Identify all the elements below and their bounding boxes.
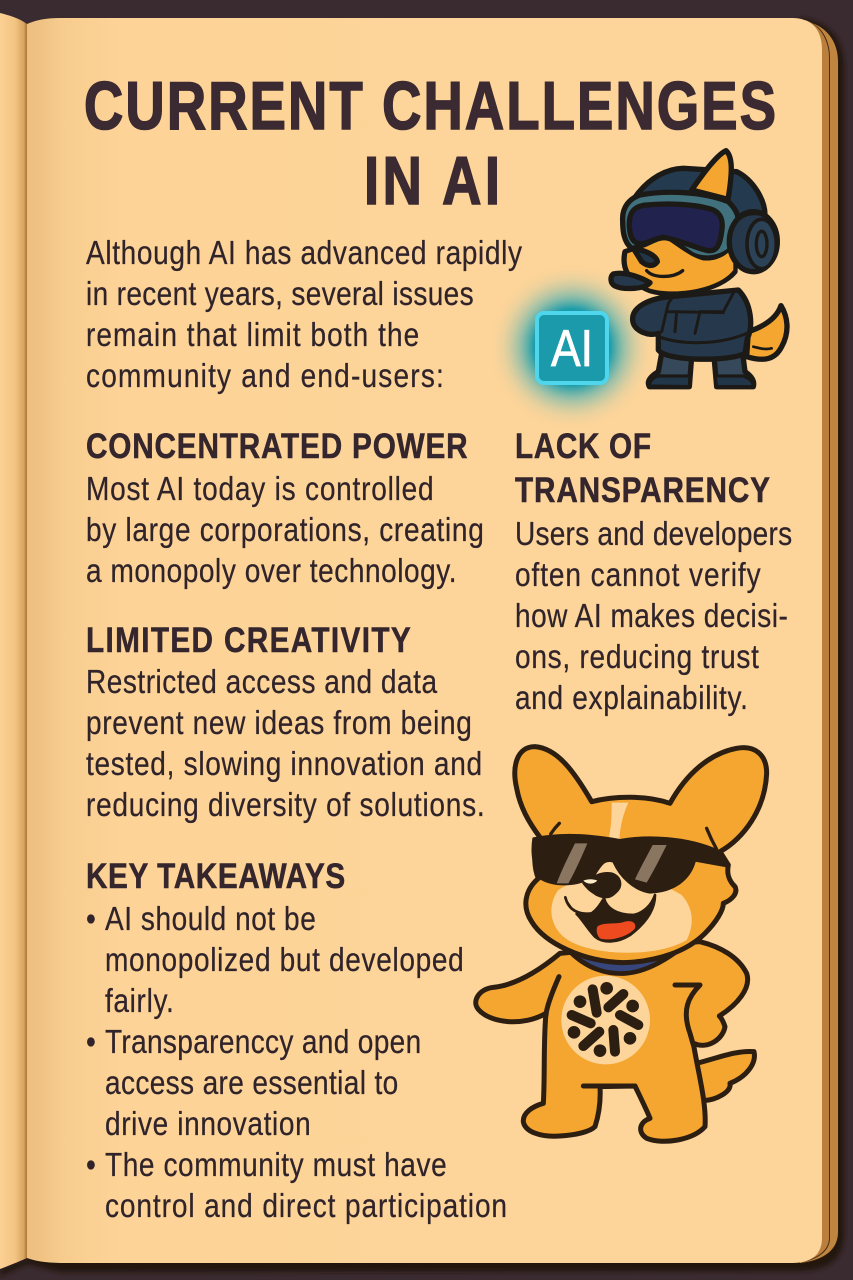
section: limited creativity: LIMITED CREATIVITY [86, 621, 411, 660]
body and legs [476, 942, 748, 1141]
intro text: remain that limit both the [86, 317, 419, 354]
intro text: Although AI has advanced rapidly [86, 235, 523, 272]
section: key takeaways: fairly. [105, 983, 174, 1020]
section: concentrated power: by large corporations, creating [86, 512, 484, 549]
nose and mouth [583, 873, 620, 897]
section: lack of transparency: ons, reducing trust [515, 639, 759, 676]
section: key takeaways [86, 857, 507, 1225]
title: IN AI [364, 143, 500, 219]
sunglasses [532, 835, 728, 893]
section: key takeaways: The community must have [105, 1147, 447, 1184]
icon: fox pilot mascot [611, 151, 787, 387]
section: key takeaways: access are essential to [105, 1065, 398, 1102]
section: key takeaways: KEY TAKEAWAYS [86, 857, 345, 896]
section: limited creativity: reducing diversity of solutions. [86, 787, 485, 824]
section: key takeaways: drive innovation [105, 1106, 311, 1143]
section: lack of transparency: LACK OF [515, 427, 651, 466]
bandana [570, 952, 675, 974]
section: key takeaways: • [86, 1147, 96, 1184]
icon: corgi mascot with sunglasses [476, 747, 767, 1141]
section: lack of transparency: Users and developers [515, 516, 792, 553]
left page [0, 13, 27, 1269]
section: limited creativity: Restricted access and data [86, 664, 438, 701]
section: concentrated power: CONCENTRATED POWER [86, 427, 468, 466]
section: lack of transparency: how AI makes decisi- [515, 598, 788, 635]
section: lack of transparency [515, 427, 792, 717]
intro text [86, 235, 523, 395]
section: key takeaways: AI should not be [105, 901, 316, 938]
section: concentrated power: Most AI today is controlled [86, 471, 434, 508]
section: key takeaways: • [86, 1024, 96, 1061]
section: concentrated power [86, 427, 484, 590]
section: key takeaways: control and direct participation [105, 1188, 507, 1225]
muzzle [551, 857, 692, 953]
chest logo [561, 976, 650, 1064]
section: key takeaways: monopolized but developed [105, 942, 464, 979]
icon: glowing AI badge [488, 263, 656, 431]
icon: glowing AI badge: AI [551, 320, 593, 378]
ears and head [515, 747, 767, 963]
arm and leg lines [546, 977, 700, 1086]
section: key takeaways: • [86, 901, 96, 938]
forehead stripe [608, 803, 628, 840]
tail [697, 1051, 754, 1101]
section: limited creativity: tested, slowing innovation and [86, 746, 482, 783]
section: concentrated power: a monopoly over technology. [86, 553, 457, 590]
section: key takeaways: Transparenccy and open [105, 1024, 421, 1061]
title [84, 68, 776, 219]
section: lack of transparency: often cannot verify [515, 557, 761, 594]
intro text: community and end-users: [86, 358, 444, 395]
section: lack of transparency: and explainability. [515, 680, 748, 717]
intro text: in recent years, several issues [86, 276, 474, 313]
section: limited creativity: prevent new ideas from being [86, 705, 472, 742]
title: CURRENT CHALLENGES [84, 68, 776, 144]
section: limited creativity [86, 621, 485, 824]
section: lack of transparency: TRANSPARENCY [515, 471, 770, 510]
